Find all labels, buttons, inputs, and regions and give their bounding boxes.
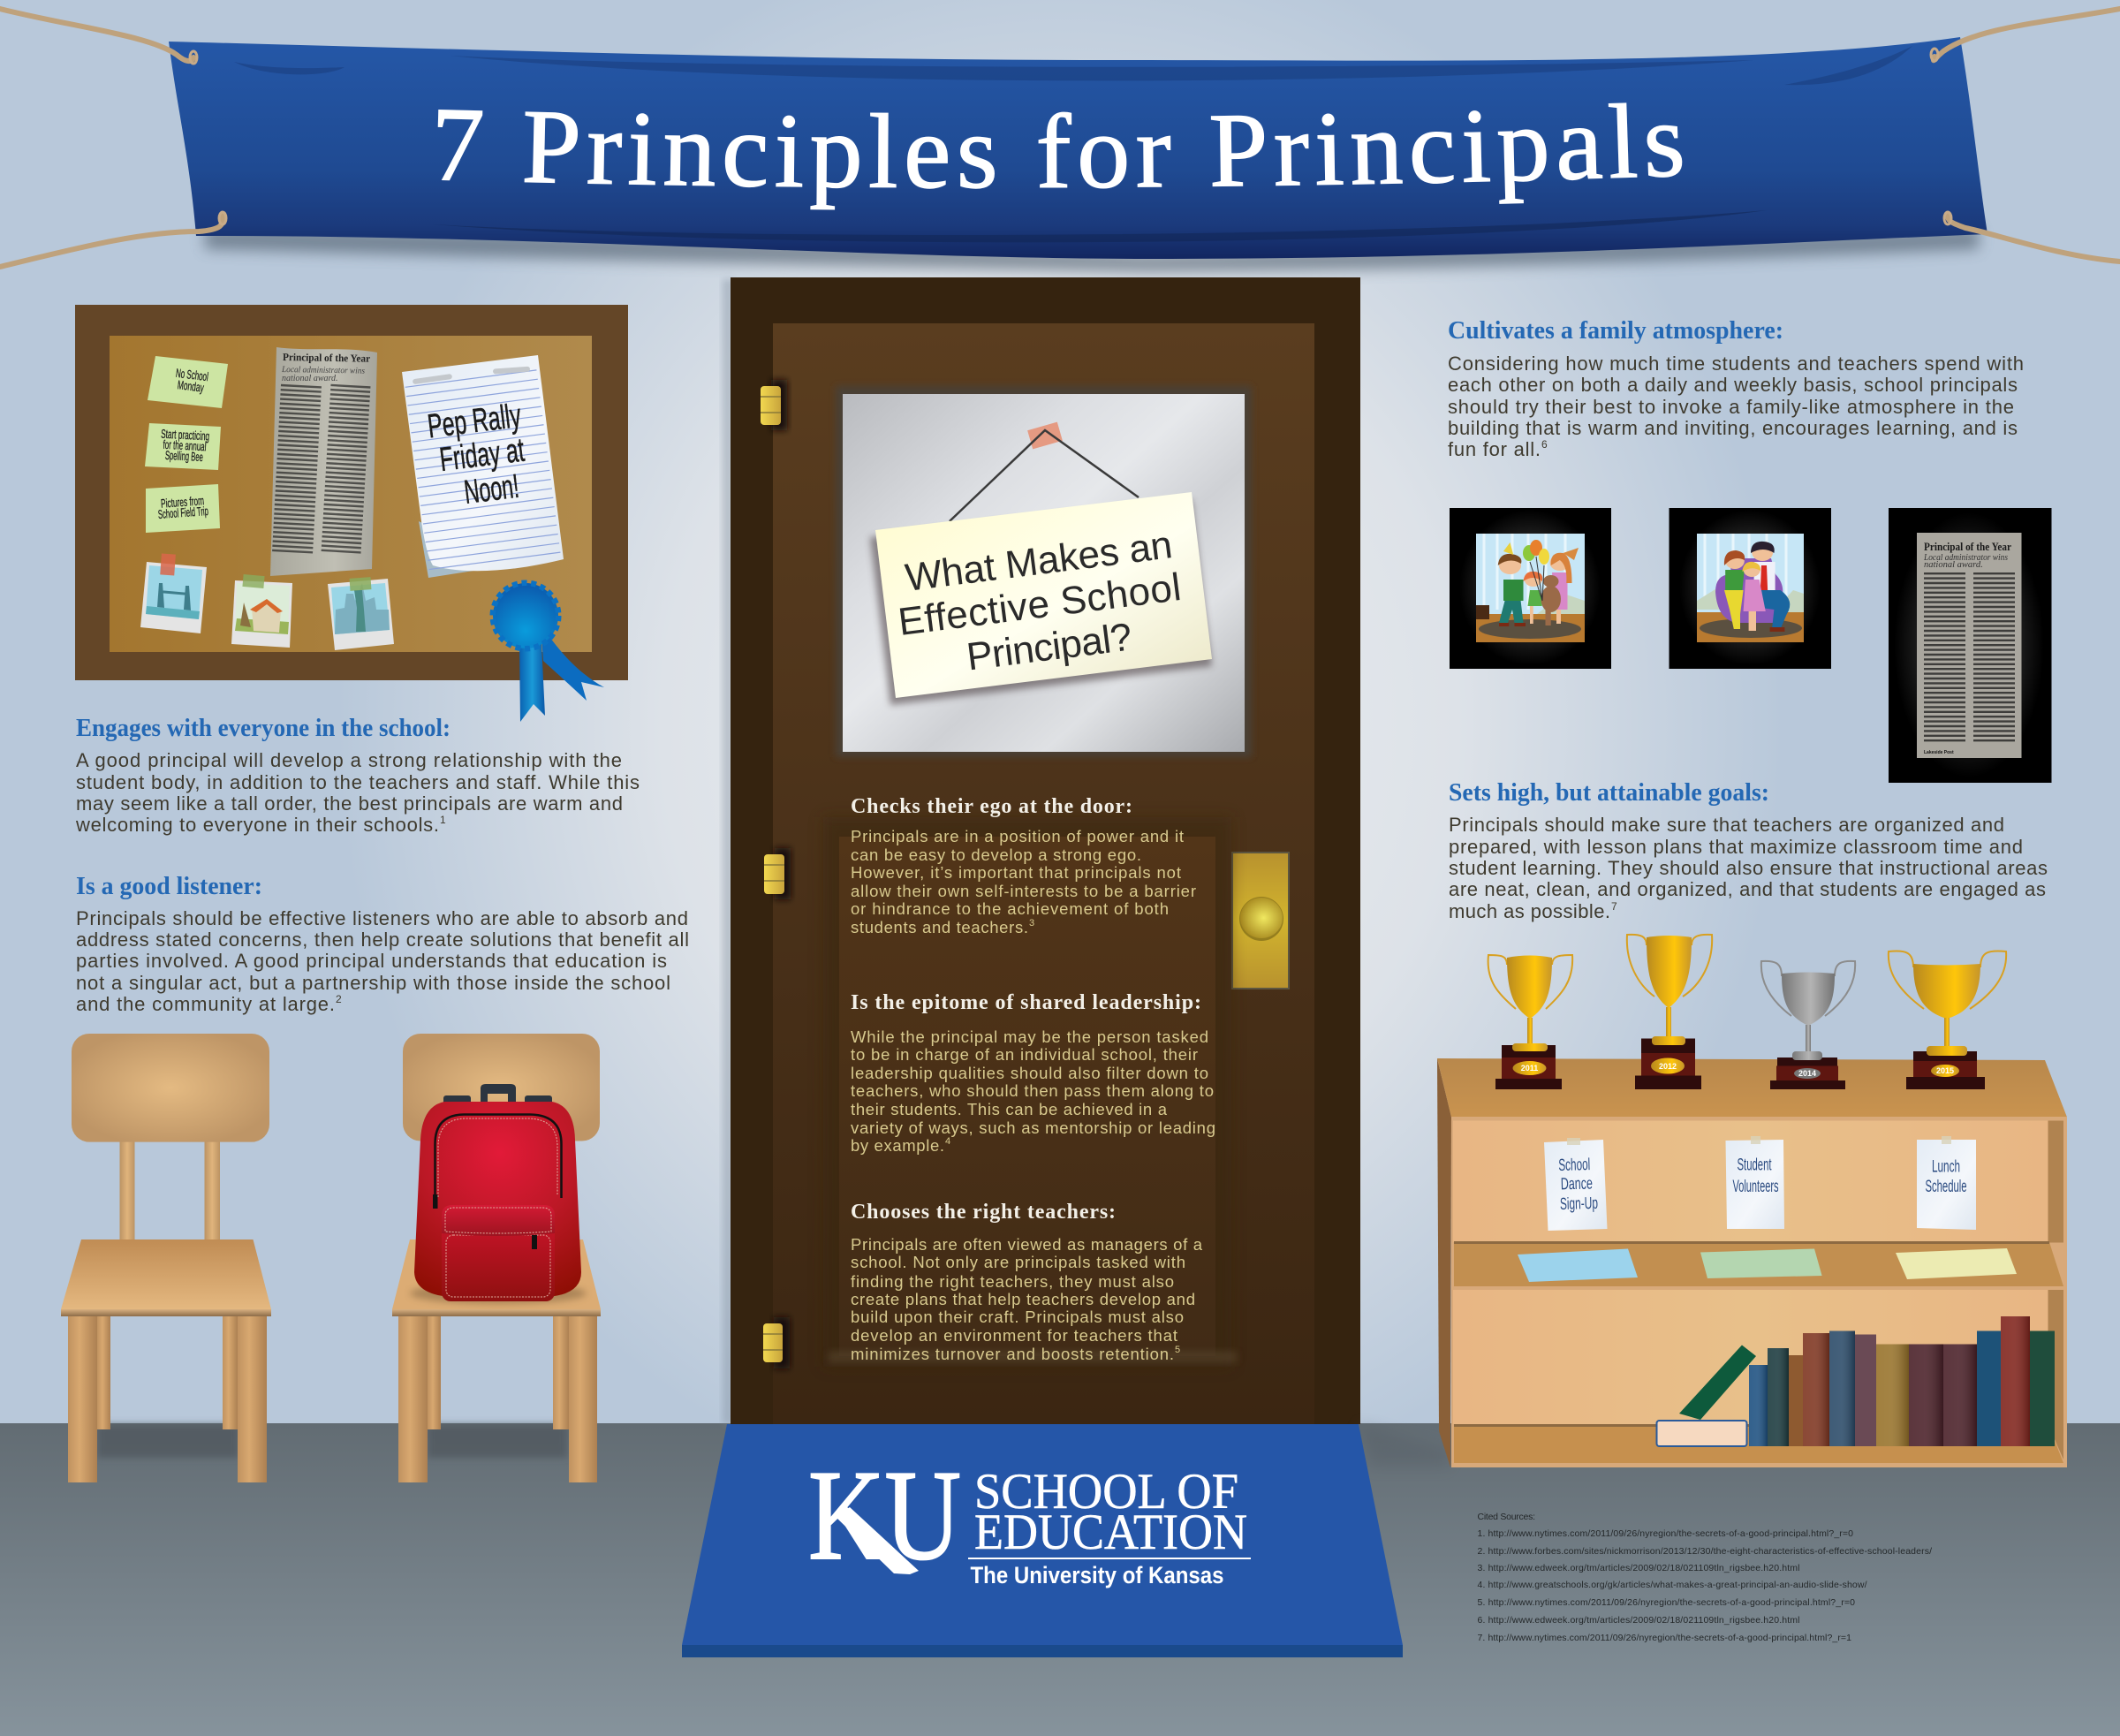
text: checks their ego: students and teachers. — [851, 918, 1028, 936]
bookshelf — [1437, 1058, 2067, 1467]
banner cloth — [169, 37, 1988, 259]
sign: Effective School — [896, 565, 1184, 644]
mother and bear — [1541, 548, 1579, 625]
text: good listener: Principals should be effective listeners who are able to absorb and — [76, 907, 688, 929]
text: good listener: Is a good listener: — [76, 873, 262, 900]
text: right teachers: finding the right teachers, they must also — [851, 1272, 1174, 1291]
KU logo: The University of Kansas — [970, 1562, 1224, 1588]
banner shadow — [205, 228, 1979, 272]
text: good listener — [76, 873, 689, 1015]
text: high goals: much as possible. — [1449, 900, 1610, 922]
armchair — [1715, 558, 1783, 623]
door panel — [773, 323, 1314, 1424]
framed article: principal of the year: Lakeside Post — [1924, 750, 1954, 755]
note: lunch schedule: Lunch — [1932, 1157, 1960, 1177]
note: school dance — [1544, 1138, 1608, 1231]
backpack body — [414, 1102, 581, 1300]
trophy 2011: 2011 — [1521, 1064, 1538, 1073]
board frame — [75, 305, 628, 680]
door floor shadow — [1359, 1424, 1449, 1467]
ribbon tails — [541, 638, 604, 701]
cork surface — [110, 336, 592, 652]
text: checks their ego: or hindrance to the achievement of both — [851, 899, 1169, 918]
sticky note: no school — [148, 356, 228, 408]
banner — [0, 6, 2120, 277]
text: family atmosphere: Considering how much time students and teachers spend with — [1448, 353, 2024, 375]
photo: statue of liberty — [328, 577, 394, 650]
text: shared leadership — [851, 991, 1215, 1155]
KU logo: EDUCATION — [974, 1505, 1247, 1560]
note: school dance: School — [1558, 1156, 1591, 1175]
door side shadow — [723, 279, 733, 1424]
rosette — [493, 583, 558, 648]
grommets — [190, 49, 1951, 224]
trophy 2014: 2014 — [1798, 1069, 1816, 1078]
banner folds — [234, 46, 1912, 242]
text: checks their ego: can be easy to develop a strong ego. — [851, 845, 1141, 864]
text: good listener: and the community at large. — [76, 993, 335, 1015]
text: shared leadership: 4 — [945, 1136, 950, 1147]
floor shadows under chairs — [97, 1424, 567, 1458]
lower compartment — [1453, 1290, 2048, 1424]
lined paper: pep rally — [402, 355, 564, 578]
framed picture: family on chair — [1670, 508, 1831, 669]
text: right teachers: Principals are often viewed as managers of a — [851, 1235, 1203, 1254]
text: engages with everyone: A good principal will develop a strong relationship with the — [76, 749, 622, 771]
text: shared leadership: variety of ways, such as mentorship or leading — [851, 1118, 1215, 1137]
text: engages with everyone: may seem like a tall order, the best principals are warm and — [76, 792, 623, 815]
text: family atmosphere — [1448, 317, 2024, 460]
chair right — [392, 1034, 601, 1482]
text: high goals: are neat, clean, and organized, and that students are engaged as — [1449, 878, 2046, 900]
girl — [1742, 562, 1766, 631]
cited sources: 7. http://www.nytimes.com/2011/09/26/nyregion/the-secrets-of-a-good-principal.html?_r=1 — [1477, 1633, 1851, 1643]
text: family atmosphere: fun for all. — [1448, 438, 1541, 460]
sticky note: no school: No School — [175, 366, 209, 383]
text: checks their ego: However, it’s important that principals not — [851, 863, 1181, 882]
shelf left side — [1437, 1058, 1451, 1467]
sign: Principal? — [965, 615, 1134, 679]
newspaper clipping — [270, 347, 377, 576]
note: student volunteers — [1726, 1136, 1784, 1229]
text: right teachers: Chooses the right teachers: — [851, 1201, 1116, 1224]
hinges — [761, 380, 791, 1368]
trophy 2012: 2012 — [1659, 1062, 1677, 1071]
sticky note: spelling bee: Start practicing — [161, 427, 210, 443]
text: checks their ego: 3 — [1029, 918, 1034, 929]
doormat — [682, 1424, 1449, 1657]
sign — [875, 492, 1212, 698]
text: high goals: Sets high, but attainable goals: — [1449, 779, 1769, 807]
text: good listener: address stated concerns, then help create solutions that benefit all — [76, 929, 689, 951]
text: high goals — [1449, 779, 2048, 922]
text: family atmosphere: Cultivates a family atmosphere: — [1448, 317, 1783, 345]
balloons — [1523, 540, 1549, 601]
cited sources: 1. http://www.nytimes.com/2011/09/26/nyregion/the-secrets-of-a-good-principal.html?_r=0 — [1477, 1528, 1853, 1539]
note: student volunteers: Student — [1737, 1156, 1772, 1175]
note: lunch schedule — [1917, 1136, 1976, 1230]
newspaper clipping: Local administrator wins — [281, 365, 365, 376]
text: engages with everyone: welcoming to everyone in their schools. — [75, 814, 439, 836]
text: right teachers — [851, 1201, 1203, 1363]
shelf front frame — [1451, 1117, 2067, 1467]
text: checks their ego — [851, 795, 1196, 936]
ropes — [0, 9, 2120, 267]
text: shared leadership: Is the epitome of shared leadership: — [851, 991, 1201, 1014]
sticky note: field trip: Pictures from — [161, 493, 205, 511]
upper compartment — [1453, 1120, 2048, 1242]
girl — [1523, 572, 1542, 624]
cited sources: 2. http://www.forbes.com/sites/nickmorrison/2013/12/30/the-eight-characteristics-of-effective-school-leaders/ — [1477, 1546, 1932, 1557]
text: right teachers: build upon their craft. Principals must also — [851, 1308, 1184, 1326]
chair left — [61, 1034, 271, 1482]
lined paper: pep rally: Friday at — [437, 432, 526, 479]
trophy 2012 — [1627, 935, 1712, 1089]
text: family atmosphere: each other on both a daily and weekly basis, school principals — [1448, 374, 2018, 396]
sticky note: spelling bee: Spelling Bee — [165, 448, 203, 464]
text: right teachers: school. Not only are principals tasked with — [851, 1253, 1185, 1271]
flat book — [1657, 1421, 1747, 1446]
bulletin board — [75, 305, 628, 680]
KU logo — [808, 1444, 1251, 1588]
text: family atmosphere: 6 — [1541, 438, 1548, 451]
KU logo: SCHOOL OF — [974, 1464, 1238, 1520]
note: school dance: Dance — [1561, 1174, 1593, 1194]
books — [1657, 1316, 2055, 1446]
cited sources — [1477, 1512, 1932, 1643]
text: shared leadership: to be in charge of an individual school, their — [851, 1045, 1198, 1064]
shelf top — [1437, 1058, 2067, 1117]
framed article: principal of the year: Principal of the Year — [1924, 541, 2011, 553]
text: high goals: 7 — [1611, 900, 1617, 913]
cited sources: 4. http://www.greatschools.org/gk/articles/what-makes-a-great-principal-an-audio-slide-show/ — [1477, 1580, 1867, 1590]
leaning book — [1679, 1345, 1756, 1420]
title: 7 Principles for Principals — [438, 102, 1682, 210]
text: good listener: not a singular act, but a partnership with those inside the school — [76, 972, 670, 994]
trophy 2015: 2015 — [1936, 1066, 1954, 1075]
sign shadow — [870, 499, 1212, 705]
backpack pocket — [442, 1224, 555, 1301]
cited sources: Cited Sources: — [1477, 1512, 1535, 1522]
lined paper: pep rally: Pep Rally — [426, 398, 523, 445]
text: high goals: Principals should make sure that teachers are organized and — [1449, 814, 2004, 836]
text: engages with everyone — [75, 715, 640, 836]
door — [723, 277, 1360, 1424]
lined paper: pep rally: Noon! — [462, 468, 521, 512]
sign: What Makes an — [903, 523, 1175, 600]
framed picture: family party — [1450, 508, 1611, 669]
trophy 2014 — [1761, 961, 1855, 1089]
trophy 2015 — [1889, 951, 2006, 1089]
text: right teachers: 5 — [1175, 1345, 1180, 1355]
text: high goals: prepared, with lesson plans that maximize classroom time and — [1449, 836, 2023, 858]
family members — [1724, 542, 1790, 632]
paper stacks — [1518, 1248, 2017, 1282]
sticky note: spelling bee: for the annual — [163, 437, 207, 453]
note: school dance: Sign-Up — [1560, 1194, 1598, 1214]
text: family atmosphere: building that is warm and inviting, encourages learning, and is — [1448, 417, 2018, 439]
sticky note: no school: Monday — [177, 377, 205, 395]
trophy 2011 — [1488, 955, 1572, 1089]
text: good listener: parties involved. A good principal understands that education is — [76, 950, 667, 972]
photo: temple — [231, 574, 292, 648]
text: good listener: 2 — [336, 993, 342, 1005]
text: shared leadership: leadership qualities should also filter down to — [851, 1064, 1208, 1082]
text: shared leadership: by example. — [851, 1136, 944, 1155]
backpack handles — [481, 1084, 516, 1104]
father — [1498, 542, 1526, 626]
sticky note: field trip — [146, 484, 220, 533]
newspaper clipping: national award. — [282, 374, 338, 383]
newspaper clipping: Principal of the Year — [283, 351, 371, 365]
floor — [0, 1423, 2120, 1736]
hanging string — [950, 422, 1139, 521]
middle shelf board — [1454, 1242, 2063, 1286]
text: engages with everyone: 1 — [440, 814, 446, 826]
father — [1751, 542, 1790, 632]
text: checks their ego: Checks their ego at the door: — [851, 795, 1132, 818]
note: student volunteers: Volunteers — [1733, 1178, 1779, 1196]
text: checks their ego: Principals are in a position of power and it — [851, 827, 1184, 845]
backpack — [410, 1084, 587, 1304]
text: shared leadership: teachers, who should then pass them along to — [851, 1081, 1214, 1100]
door text background — [823, 817, 1237, 1367]
text: right teachers: minimizes turnover and boosts retention. — [851, 1345, 1174, 1363]
text: shared leadership: While the principal may be the person tasked — [851, 1027, 1208, 1046]
KU logo: KU — [808, 1444, 961, 1587]
text: engages with everyone: student body, in addition to the teachers and staff. While this — [76, 771, 640, 793]
window — [836, 386, 1252, 757]
framed article: principal of the year — [1889, 508, 2051, 783]
text: right teachers: create plans that help teachers develop and — [851, 1290, 1195, 1308]
sticky note: field trip: School Field Trip — [157, 504, 208, 521]
cited sources: 5. http://www.nytimes.com/2011/09/26/nyregion/the-secrets-of-a-good-principal.html?_r=0 — [1477, 1597, 1855, 1608]
text: high goals: student learning. They should also ensure that instructional areas — [1449, 857, 2048, 879]
ribbon — [493, 583, 604, 722]
cited sources: 6. http://www.edweek.org/tm/articles/2009/02/18/021109tln_rigsbee.h20.html — [1477, 1615, 1800, 1626]
cited sources: 3. http://www.edweek.org/tm/articles/2009/02/18/021109tln_rigsbee.h20.html — [1477, 1563, 1800, 1573]
text: right teachers: develop an environment for teachers that — [851, 1326, 1177, 1345]
door frame — [731, 277, 1360, 1424]
door knob — [1232, 853, 1289, 989]
text: family atmosphere: should try their best to invoke a family-like atmosphere in the — [1448, 396, 2014, 418]
framed article: principal of the year: national award. — [1924, 560, 1983, 570]
text: engages with everyone: Engages with everyone in the school: — [76, 715, 450, 742]
text: checks their ego: allow their own self-interests to be a barrier — [851, 882, 1196, 900]
mother — [1724, 550, 1745, 629]
framed article: principal of the year: Local administrator wins — [1923, 553, 2008, 563]
text: shared leadership: their students. This can be achieved in a — [851, 1100, 1168, 1118]
photo: tower bridge — [140, 553, 207, 633]
note: lunch schedule: Schedule — [1926, 1178, 1966, 1196]
sticky note: spelling bee — [145, 423, 221, 470]
